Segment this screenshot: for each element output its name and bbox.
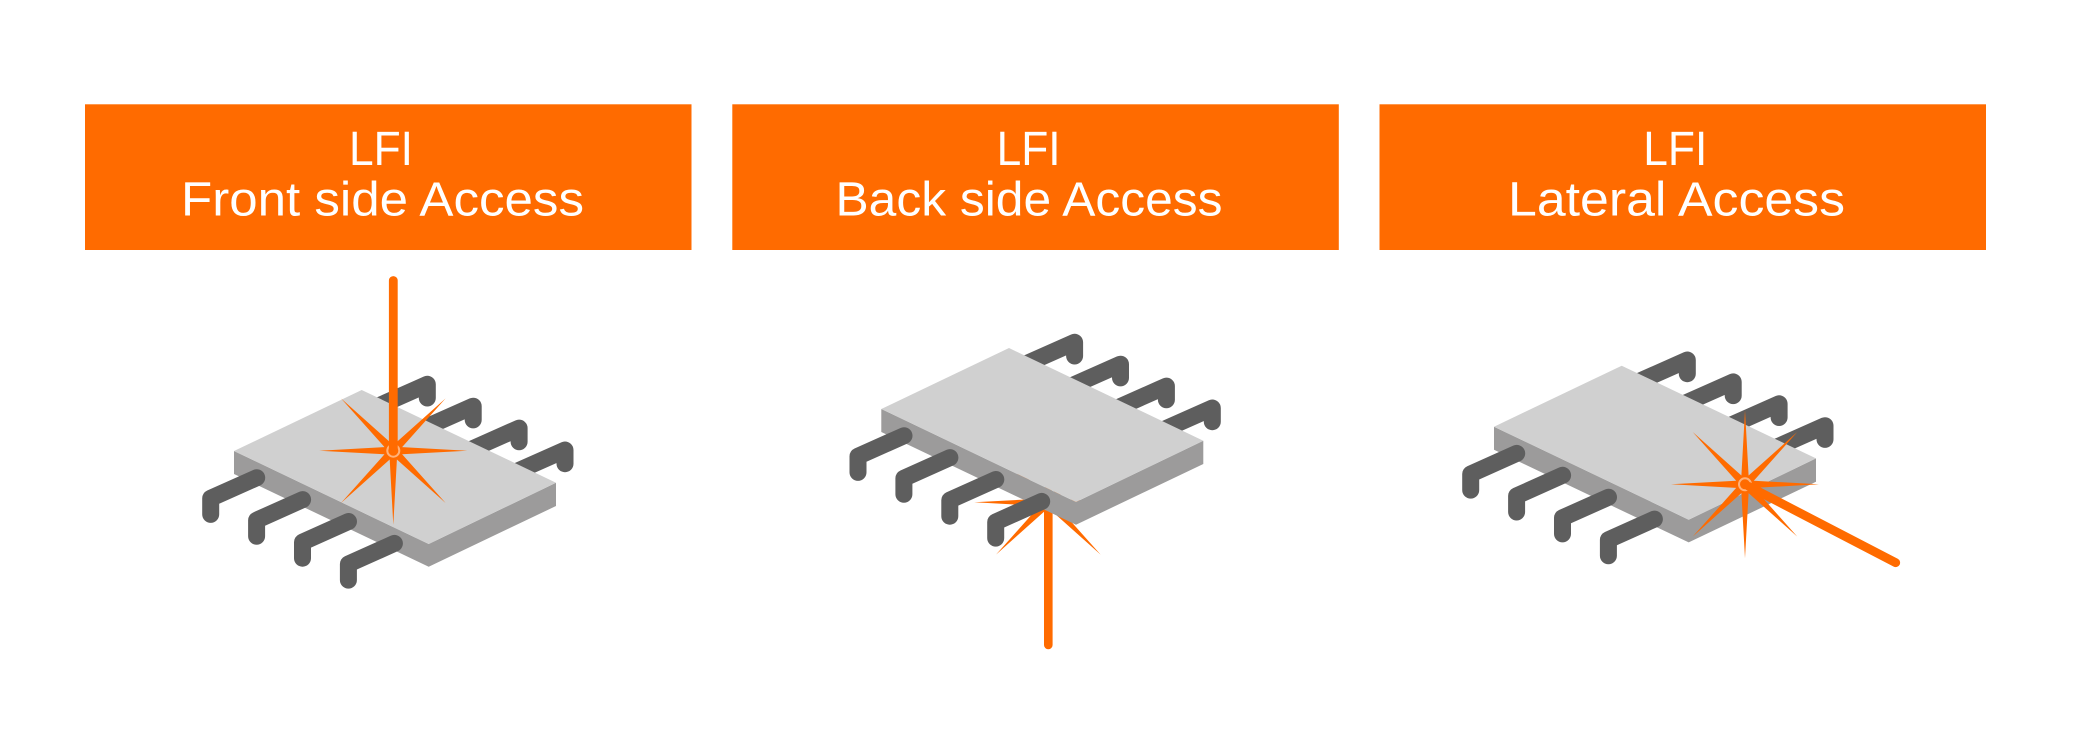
laser beam: front side: [389, 280, 398, 450]
laser burst and beam: back side: [974, 428, 1122, 645]
panel header: back side access: [732, 104, 1339, 250]
chip illustration: front side: [211, 384, 565, 580]
panel header: front side access: Front side Access: [181, 174, 584, 227]
laser burst: lateral: [1671, 410, 1819, 558]
panel header: front side access: LFI: [349, 123, 413, 176]
panel header: lateral access: LFI: [1643, 123, 1707, 176]
panel header: lateral access: [1380, 104, 1986, 250]
chip illustration: back side: [858, 342, 1212, 538]
panel header: back side access: Back side Access: [836, 174, 1222, 227]
chip illustration: lateral: [1471, 360, 1825, 556]
panel header: back side access: LFI: [997, 123, 1061, 176]
panel header: front side access: [85, 104, 692, 250]
laser burst: front side: [319, 377, 467, 525]
laser beam: lateral: [1749, 486, 1896, 563]
panel header: lateral access: Lateral Access: [1508, 174, 1845, 227]
